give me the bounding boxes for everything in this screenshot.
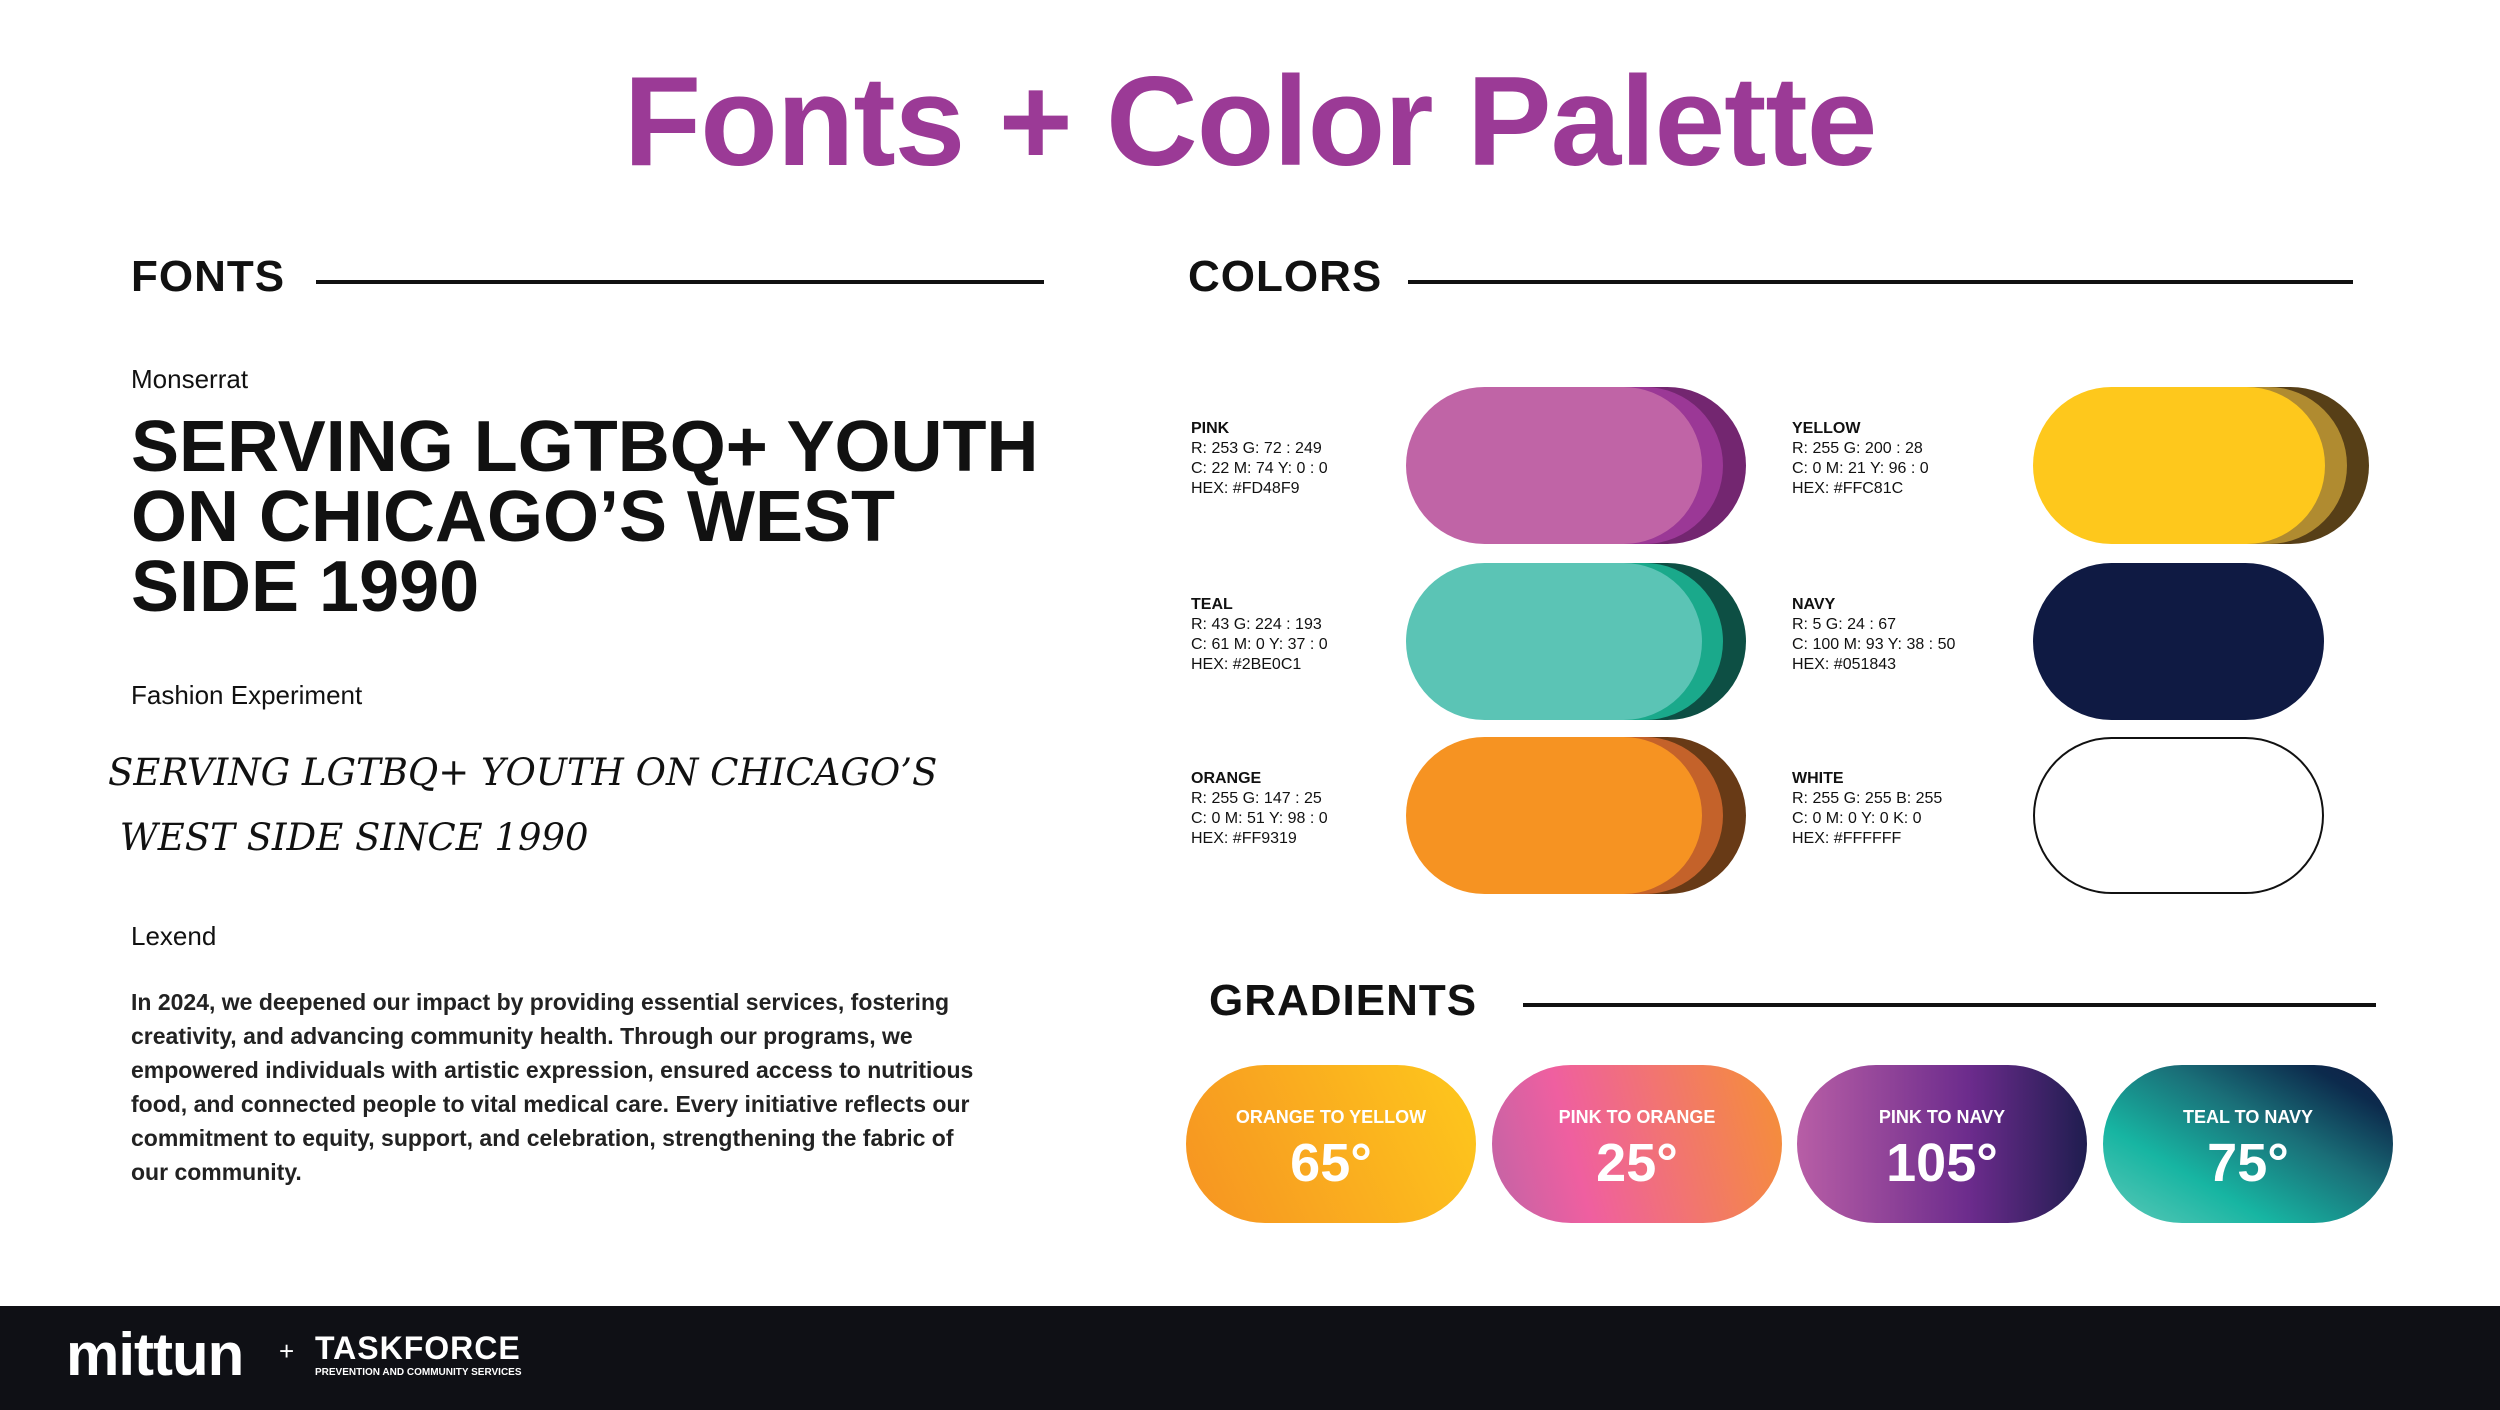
gradient: teal to navy: TEAL TO NAVY [2183, 1107, 2313, 1127]
swatch: navy: C: 100 M: 93 Y: 38 : 50 [1792, 636, 1955, 653]
swatch: navy: NAVY [1792, 596, 1835, 613]
swatch: white: HEX: #FFFFFF [1792, 830, 1901, 847]
swatch: pink: C: 22 M: 74 Y: 0 : 0 [1191, 460, 1328, 477]
swatch: orange: R: 255 G: 147 : 25 [1191, 790, 1322, 807]
swatch: teal: TEAL [1191, 596, 1233, 613]
swatch: navy [1792, 563, 2324, 720]
swatch: orange: ORANGE [1191, 770, 1261, 787]
swatch: yellow: C: 0 M: 21 Y: 96 : 0 [1792, 460, 1929, 477]
sample: handwritten: SERVING LGTBQ+ YOUTH ON CHICAGO’S [108, 751, 937, 794]
swatch: teal: R: 43 G: 224 : 193 [1191, 616, 1322, 633]
gradient: pink to navy: PINK TO NAVY [1879, 1107, 2005, 1127]
swatch: orange: HEX: #FF9319 [1191, 830, 1297, 847]
sample paragraph [131, 989, 973, 1185]
swatch: orange [1191, 737, 1746, 894]
sample: Montserrat heading [131, 407, 1038, 627]
gradient: pink to orange: PINK TO ORANGE [1559, 1107, 1715, 1127]
footer [0, 1306, 2500, 1410]
swatch: yellow: HEX: #FFC81C [1792, 480, 1903, 497]
gradient: orange to yellow: 65° [1290, 1133, 1372, 1193]
logo: mittun: mittun [66, 1321, 243, 1388]
sample paragraph: food, and connected people to vital medical care. Every initiative reflects our [131, 1091, 969, 1117]
gradient: orange to yellow: ORANGE TO YELLOW [1236, 1107, 1426, 1127]
sample: handwritten: WEST SIDE SINCE 1990 [120, 816, 589, 859]
sample paragraph: our community. [131, 1159, 302, 1185]
swatch: pink: PINK [1191, 420, 1229, 437]
sample: handwritten [108, 751, 937, 859]
gradient: teal to navy: 75° [2207, 1133, 2289, 1193]
gradient: pink to navy [1797, 1065, 2087, 1223]
swatch: navy: R: 5 G: 24 : 67 [1792, 616, 1896, 633]
gradient: orange to yellow [1186, 1065, 1476, 1223]
heading: colors: COLORS [1188, 252, 1382, 301]
logo: taskforce: TASKFORCE [315, 1330, 521, 1366]
title: Fonts + Color Palette [624, 50, 1876, 192]
font label: Fashion Experiment: Fashion Experiment [131, 680, 362, 710]
gradient: pink to navy: 105° [1886, 1133, 1998, 1193]
swatch: white: WHITE [1792, 770, 1844, 787]
sample paragraph: empowered individuals with artistic expression, ensured access to nutritious [131, 1057, 973, 1083]
sample paragraph: commitment to equity, support, and celebration, strengthening the fabric of [131, 1125, 954, 1151]
font label: Monserrat: Monserrat [131, 364, 248, 394]
swatch: white: C: 0 M: 0 Y: 0 K: 0 [1792, 810, 1922, 827]
sample: Montserrat heading: SIDE 1990 [131, 547, 479, 627]
gradient: pink to orange: 25° [1596, 1133, 1678, 1193]
gradient: pink to orange [1492, 1065, 1782, 1223]
swatch: pink: R: 253 G: 72 : 249 [1191, 440, 1322, 457]
logo: taskforce: PREVENTION AND COMMUNITY SERVICES [315, 1367, 522, 1378]
swatch: teal: HEX: #2BE0C1 [1191, 656, 1301, 673]
font label: Lexend: Lexend [131, 921, 216, 951]
swatch: pink [1191, 387, 1746, 544]
gradient: teal to navy [2103, 1065, 2393, 1223]
plus: + [279, 1336, 294, 1366]
swatch: teal [1191, 563, 1746, 720]
sample: Montserrat heading: ON CHICAGO’S WEST [131, 477, 895, 557]
sample paragraph: creativity, and advancing community health. Through our programs, we [131, 1023, 913, 1049]
sample paragraph: In 2024, we deepened our impact by providing essential services, fostering [131, 989, 949, 1015]
swatch: orange: C: 0 M: 51 Y: 98 : 0 [1191, 810, 1328, 827]
swatch: white [1792, 737, 2324, 894]
heading: gradients: GRADIENTS [1209, 976, 1477, 1025]
sample: Montserrat heading: SERVING LGTBQ+ YOUTH [131, 407, 1038, 487]
swatch: navy: HEX: #051843 [1792, 656, 1896, 673]
swatch: yellow: R: 255 G: 200 : 28 [1792, 440, 1923, 457]
swatch: yellow: YELLOW [1792, 420, 1860, 437]
heading: fonts: FONTS [131, 252, 285, 301]
swatch: yellow [1792, 387, 2369, 544]
swatch: white: R: 255 G: 255 B: 255 [1792, 790, 1942, 807]
swatch: teal: C: 61 M: 0 Y: 37 : 0 [1191, 636, 1328, 653]
swatch: pink: HEX: #FD48F9 [1191, 480, 1299, 497]
